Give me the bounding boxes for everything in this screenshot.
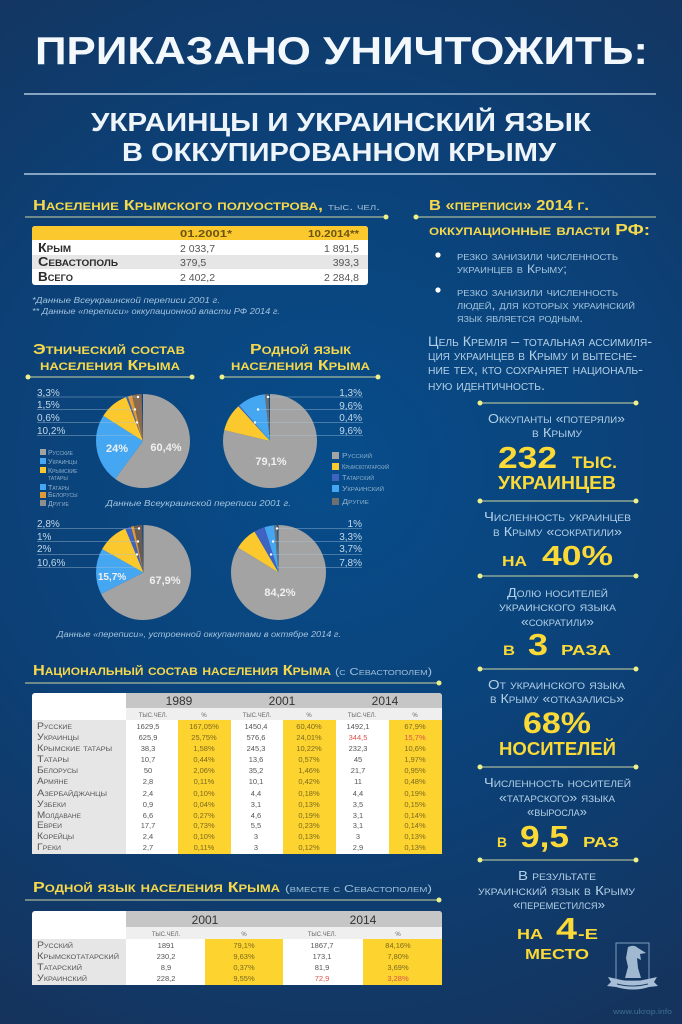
heading: national composition (33, 662, 432, 679)
row: Русский (37, 940, 411, 950)
heading: native language table: Родной язык населения Крыма (33, 879, 280, 896)
paragraph: Kremlin's goal: ция украинцев в Крыму и вытесне- (428, 347, 637, 363)
table: national composition: % (412, 713, 418, 719)
row: Азербайджанцы: 0,18% (298, 789, 320, 798)
row: Украинский: 9,55% (233, 974, 255, 983)
website url: www.ukrop.info (612, 1009, 672, 1016)
pie chart: language 2014 (255, 549, 302, 599)
table: population: Севастополь (38, 254, 119, 269)
row: Молдаване: 4,6 (251, 811, 261, 820)
stat: 9.5 times: Численность носителей (484, 775, 631, 790)
row: Крымские татары (37, 743, 426, 753)
legend: language (332, 452, 389, 506)
row: Греки: 0,13% (404, 843, 426, 852)
row: Крымские татары: 245,3 (247, 744, 265, 753)
table: population: 393,3 (333, 257, 359, 269)
heading: native language: Родной язык (250, 341, 351, 358)
table: native language: 2001 (192, 913, 219, 927)
row: Крымские татары: 1,58% (193, 744, 215, 753)
row: Корейцы: 3 (356, 832, 360, 841)
stat: 68 percent: От украинского языка (488, 677, 625, 692)
row: Крымскотатарский: Крымскотатарский (37, 951, 119, 961)
row: Молдаване: 0,27% (193, 811, 215, 820)
row: Русские: 1492,1 (347, 722, 369, 731)
pie labels: language 2001 (254, 388, 363, 437)
bullet list (435, 249, 635, 325)
stat: 9.5 times: РАЗ (583, 834, 619, 851)
row: Молдаване: 0,19% (298, 811, 320, 820)
row: Азербайджанцы: 0,19% (404, 789, 426, 798)
row: Евреи: 3,1 (353, 821, 363, 830)
row: Крымскотатарский: 173,1 (313, 952, 331, 961)
table: population: 1 891,5 (324, 243, 359, 255)
heading: population: тыс. чел. (328, 202, 380, 213)
row: Татары: 0,44% (193, 755, 215, 764)
row: Русский: 1867,7 (311, 941, 333, 950)
pie chart: ethnic 2001: 24% (106, 443, 128, 455)
pie labels: ethnic 2001: 3,3% (37, 388, 60, 399)
row: Украинский: Украинский (37, 973, 87, 983)
heading: 2014 census: В «переписи» 2014 г. (429, 197, 589, 214)
legend: language: Другие (342, 499, 370, 506)
table: native language: % (241, 932, 247, 938)
pie labels: ethnic 2001 (37, 388, 139, 437)
row: Татары: 10,7 (141, 755, 155, 764)
stat: 3 times: «сократили» (521, 614, 594, 629)
row: Крымские татары: 10,22% (296, 744, 322, 753)
row: Крымские татары: 10,6% (404, 744, 426, 753)
row: Украинцы: 25,75% (191, 733, 217, 742)
row: Азербайджанцы: 4,4 (251, 789, 261, 798)
title: ПРИКАЗАНО УНИЧТОЖИТЬ: (35, 30, 648, 73)
row: Узбеки: 3,1 (251, 800, 261, 809)
table: national composition (32, 693, 442, 854)
legend: ethnic: татары (48, 475, 68, 482)
pie labels: ethnic 2001: 1,5% (37, 400, 60, 411)
subtitle (91, 107, 591, 167)
row: Азербайджанцы: 0,10% (193, 789, 215, 798)
heading: native language table: (вместе с Севастополем) (285, 884, 432, 895)
row: Русский: 79,1% (233, 941, 255, 950)
stat: 40 percent: 40% (542, 540, 613, 571)
pie chart: language 2014: 84,2% (264, 587, 296, 599)
heading: native language table (33, 879, 432, 896)
row: Русский: 84,16% (385, 941, 411, 950)
row: Татары: 1,97% (404, 755, 426, 764)
table: national composition: 2014 (372, 694, 399, 708)
row: Белорусы: 21,7 (351, 766, 365, 775)
table: population: 2 033,7 (180, 243, 215, 255)
table footnotes: ** Данные «переписи» оккупационной власти РФ 2014 г. (32, 307, 280, 316)
heading: national composition: (с Севастополем) (335, 667, 432, 678)
stat: 232 thousand: 232 (498, 440, 557, 475)
pie labels: ethnic 2014: 2,8% (37, 519, 60, 530)
row: Корейцы: 0,13% (298, 832, 320, 841)
row: Крымскотатарский: 9,63% (233, 952, 255, 961)
stat: 9.5 times: В (497, 834, 507, 850)
table: population (32, 226, 368, 285)
stat: 9.5 times: «выросла» (527, 804, 587, 819)
row: Татары: Татары (37, 754, 69, 764)
table: population: 2 402,2 (180, 272, 215, 284)
pie chart: ethnic 2014: 15,7% (98, 572, 126, 583)
table: native language: % (395, 932, 401, 938)
pie chart: language 2001 (246, 418, 294, 468)
row: Русские: 1450,4 (245, 722, 267, 731)
pie chart: language 2001: 79,1% (255, 456, 287, 468)
table: national composition: ТЫС.ЧЕЛ. (139, 713, 168, 719)
stat: 68 percent: в Крыму «отказались» (490, 691, 624, 706)
row: Греки (37, 842, 426, 852)
legend: language: Крымскотатарский (342, 463, 389, 471)
stat: 9.5 times: «татарского» языка (499, 790, 615, 805)
row: Русский: Русский (37, 940, 73, 950)
row: Корейцы: Корейцы (37, 831, 74, 841)
row: Молдаване (37, 810, 426, 820)
pie labels: ethnic 2014: 10,6% (37, 558, 65, 569)
pie chart: ethnic 2001 (106, 418, 182, 464)
row: Армяне: 10,1 (249, 777, 263, 786)
row: Азербайджанцы: Азербайджанцы (37, 788, 107, 798)
legend: ethnic: Русские (48, 450, 74, 457)
row: Украинцы: 24,01% (296, 733, 322, 742)
row: Украинцы: 576,6 (247, 733, 265, 742)
row: Белорусы: 2,06% (193, 766, 215, 775)
caption: 2001 census: Данные Всеукраинской переписи 2001 г. (105, 499, 291, 508)
stat: 4th place: МЕСТО (525, 946, 589, 963)
row: Молдаване: 6,6 (143, 811, 153, 820)
stat: 40 percent: НА (502, 553, 527, 570)
pie labels: language 2001: 9,6% (339, 426, 362, 437)
row: Евреи: 5,5 (251, 821, 261, 830)
bullet list: язык является родным. (457, 311, 583, 325)
row: Украинцы: 344,5 (349, 733, 367, 742)
row: Русский: 1891 (158, 941, 174, 950)
stat: 9.5 times (484, 775, 631, 854)
heading: ethnic composition: населения Крыма (40, 357, 180, 374)
row: Узбеки: 3,5 (353, 800, 363, 809)
pie labels: language 2014: 3,3% (339, 532, 362, 543)
row: Татары: 45 (354, 755, 362, 764)
row: Греки: 0,11% (194, 843, 215, 852)
pie labels: ethnic 2014: 2% (37, 544, 52, 555)
stat: 3 times: РАЗА (561, 642, 611, 659)
row: Татарский: 3,69% (387, 963, 409, 972)
row: Корейцы: 3 (254, 832, 258, 841)
table: population: Крым (38, 240, 71, 255)
caption: 2014 census: Данные «переписи», устроенной оккупантами в октябре 2014 г. (56, 630, 341, 639)
stat: 3 times: 3 (528, 627, 548, 662)
stat: 3 times: Долю носителей (507, 585, 608, 600)
row: Татарский: 0,37% (233, 963, 255, 972)
stat: 232 thousand: в Крыму (532, 425, 582, 440)
table: population: 01.2001* (180, 228, 233, 240)
row: Армяне: 0,42% (298, 777, 320, 786)
stat: 3 times: В (503, 642, 515, 658)
row: Крымские татары: Крымские татары (37, 743, 112, 753)
table: population: 10.2014** (308, 228, 360, 240)
row: Русские: Русские (37, 721, 72, 731)
legend: ethnic: Татары (48, 485, 70, 492)
row: Узбеки: Узбеки (37, 799, 66, 809)
heading: ethnic composition: Этнический состав (33, 341, 185, 358)
table: native language (32, 911, 442, 985)
row: Узбеки: 0,15% (404, 800, 426, 809)
pie labels: ethnic 2001: 0,6% (37, 413, 60, 424)
row: Евреи: 17,7 (141, 821, 155, 830)
heading: national composition: Национальный состав населения Крыма (33, 662, 331, 679)
paragraph: Kremlin's goal (428, 333, 652, 393)
pie chart: ethnic 2001: 60,4% (150, 442, 182, 454)
stat: 4th place: украинский язык в Крыму (478, 883, 635, 898)
pie labels: language 2001: 9,6% (339, 401, 362, 412)
row: Крымскотатарский: 230,2 (157, 952, 175, 961)
pie labels: language 2001: 1,3% (339, 388, 362, 399)
row: Украинцы: 15,7% (404, 733, 426, 742)
row: Украинский: 228,2 (157, 974, 175, 983)
row: Греки: Греки (37, 842, 61, 852)
pie labels: ethnic 2001: 10,2% (37, 426, 65, 437)
table: native language: ТЫС.ЧЕЛ. (152, 932, 181, 938)
row: Белорусы: 1,46% (298, 766, 320, 775)
row: Русские: 67,9% (404, 722, 426, 731)
heading: native language (231, 341, 370, 374)
stat: 40 percent: в Крыму «сократили» (493, 524, 622, 539)
row: Белорусы (37, 765, 426, 775)
stat: 68 percent (488, 677, 625, 759)
row: Белорусы: 0,95% (404, 766, 426, 775)
stat: 40 percent (484, 509, 631, 571)
row: Молдаване: Молдаване (37, 810, 81, 820)
row: Белорусы: 35,2 (249, 766, 263, 775)
row: Армяне: 0,11% (194, 777, 215, 786)
row: Армяне: 11 (354, 777, 362, 786)
pie labels: ethnic 2014: 1% (37, 532, 52, 543)
bullet list: резко занизили численность (457, 285, 618, 299)
subtitle: УКРАИНЦЫ И УКРАИНСКИЙ ЯЗЫК (91, 107, 591, 137)
stat: 4th place: НА (517, 926, 543, 943)
legend: ethnic: Другие (48, 501, 69, 508)
row: Украинцы: Украинцы (37, 732, 79, 742)
row: Узбеки: 0,04% (193, 800, 215, 809)
row: Азербайджанцы: 2,4 (143, 789, 153, 798)
table: population: 379,5 (180, 257, 206, 269)
pie chart: ethnic 2014: 67,9% (149, 575, 181, 587)
heading: ethnic composition (33, 341, 185, 374)
stat: 232 thousand (488, 411, 625, 493)
row: Армяне: Армяне (37, 776, 68, 786)
legend: language: Татарский (342, 474, 374, 482)
row: Русские: 1629,5 (137, 722, 159, 731)
table: national composition: % (306, 713, 312, 719)
stat: 68 percent: НОСИТЕЛЕЙ (499, 738, 616, 759)
logo emblem (607, 943, 658, 990)
stat: 4th place: -Е (578, 926, 598, 943)
row: Узбеки: 0,9 (143, 800, 153, 809)
row: Крымскотатарский: 7,80% (387, 952, 409, 961)
subheading: occupation authorities: оккупационные власти РФ: (429, 222, 650, 239)
row: Корейцы: 2,4 (143, 832, 153, 841)
legend: language: Русский (342, 452, 372, 460)
row: Украинский (37, 973, 409, 983)
row: Евреи: Евреи (37, 820, 62, 830)
legend: ethnic: Украинцы (48, 459, 78, 466)
row: Азербайджанцы (37, 788, 426, 798)
row: Крымские татары: 38,3 (141, 744, 155, 753)
table: national composition: 2001 (269, 694, 296, 708)
stat: 4th place (478, 868, 635, 963)
bullet list: людей, для которых украинский (457, 298, 635, 312)
row: Русские (37, 721, 426, 731)
row: Греки: 2,7 (143, 843, 153, 852)
paragraph: Kremlin's goal: ние тех, кто сохраняет националь- (428, 361, 643, 377)
row: Корейцы: 0,13% (404, 832, 426, 841)
stat: 232 thousand: ТЫС. (572, 453, 617, 472)
pie labels: language 2014 (270, 519, 362, 569)
table: national composition: ТЫС.ЧЕЛ. (243, 713, 272, 719)
row: Евреи (37, 820, 426, 830)
row: Греки: 0,12% (298, 843, 320, 852)
table: native language: 2014 (350, 913, 377, 927)
legend: ethnic: Белорусы (48, 492, 78, 499)
paragraph: Kremlin's goal: Цель Кремля – тотальная ассимиля- (428, 333, 652, 349)
row: Украинцы: 625,9 (139, 733, 157, 742)
table: native language: ТЫС.ЧЕЛ. (308, 932, 337, 938)
row: Греки: 3 (254, 843, 258, 852)
heading: native language: населения Крыма (231, 357, 370, 374)
row: Татарский: 81,9 (315, 963, 329, 972)
pie labels: language 2001: 0,4% (339, 413, 362, 424)
pie labels: language 2014: 1% (348, 519, 362, 530)
row: Украинский: 72,9 (315, 974, 329, 983)
row: Евреи: 0,14% (404, 821, 426, 830)
row: Узбеки (37, 799, 426, 809)
pie labels: ethnic 2014 (37, 519, 140, 569)
row: Греки: 2,9 (353, 843, 363, 852)
legend: language: Украинский (342, 485, 384, 493)
table: population: Всего (38, 269, 73, 284)
row: Корейцы: 0,10% (193, 832, 215, 841)
row: Татары (37, 754, 426, 764)
table: population: 2 284,8 (324, 272, 359, 284)
stat: 3 times: украинского языка (499, 599, 616, 614)
stat: 3 times (499, 585, 616, 662)
row: Украинский: 3,28% (387, 974, 409, 983)
stat: 9.5 times: 9,5 (520, 819, 569, 854)
table: national composition: 1989 (166, 694, 193, 708)
row: Крымскотатарский (37, 951, 409, 961)
row: Азербайджанцы: 4,4 (353, 789, 363, 798)
row: Армяне (37, 776, 426, 786)
row: Русские: 60,40% (296, 722, 322, 731)
bullet list: резко занизили численность (457, 249, 618, 263)
row: Татарский: Татарский (37, 962, 82, 972)
pie chart: ethnic 2014 (98, 549, 181, 596)
table footnotes (32, 296, 280, 316)
stat: 4th place: «переместился» (513, 897, 605, 912)
row: Молдаване: 0,14% (404, 811, 426, 820)
row: Татарский (37, 962, 409, 972)
row: Татары: 0,57% (298, 755, 320, 764)
row: Армяне: 0,48% (404, 777, 426, 786)
stat: 4th place: В результате (518, 868, 596, 883)
pie labels: language 2014: 3,7% (339, 544, 362, 555)
row: Молдаване: 3,1 (353, 811, 363, 820)
row: Татарский: 8,9 (161, 963, 171, 972)
table: national composition: ТЫС.ЧЕЛ. (348, 713, 377, 719)
heading: population: Население Крымского полуострова, (33, 197, 323, 214)
legend: ethnic (40, 449, 78, 508)
bullet list: украинцев в Крыму; (457, 262, 567, 276)
stat: 4th place: 4 (556, 911, 578, 946)
table footnotes: *Данные Всеукраинской переписи 2001 г. (32, 296, 220, 305)
paragraph: Kremlin's goal: ную идентичность. (428, 377, 545, 393)
table: national composition: % (201, 713, 207, 719)
stat: 68 percent: 68% (523, 707, 591, 740)
row: Белорусы: 50 (144, 766, 152, 775)
row: Узбеки: 0,13% (298, 800, 320, 809)
row: Евреи: 0,23% (298, 821, 320, 830)
legend: ethnic: Крымские (48, 468, 78, 475)
row: Украинцы (37, 732, 426, 742)
row: Корейцы (37, 831, 426, 841)
row: Армяне: 2,8 (143, 777, 153, 786)
subtitle: В ОККУПИРОВАННОМ КРЫМУ (122, 137, 557, 167)
row: Крымские татары: 232,3 (349, 744, 367, 753)
pie labels: language 2014: 7,8% (339, 558, 362, 569)
row: Русские: 167,05% (189, 722, 219, 731)
row: Татары: 13,6 (249, 755, 263, 764)
stat: 232 thousand: УКРАИНЦЕВ (498, 473, 616, 493)
stat: 232 thousand: Оккупанты «потеряли» (488, 411, 625, 426)
row: Белорусы: Белорусы (37, 765, 78, 775)
row: Евреи: 0,73% (193, 821, 215, 830)
stat: 40 percent: Численность украинцев (484, 509, 631, 524)
